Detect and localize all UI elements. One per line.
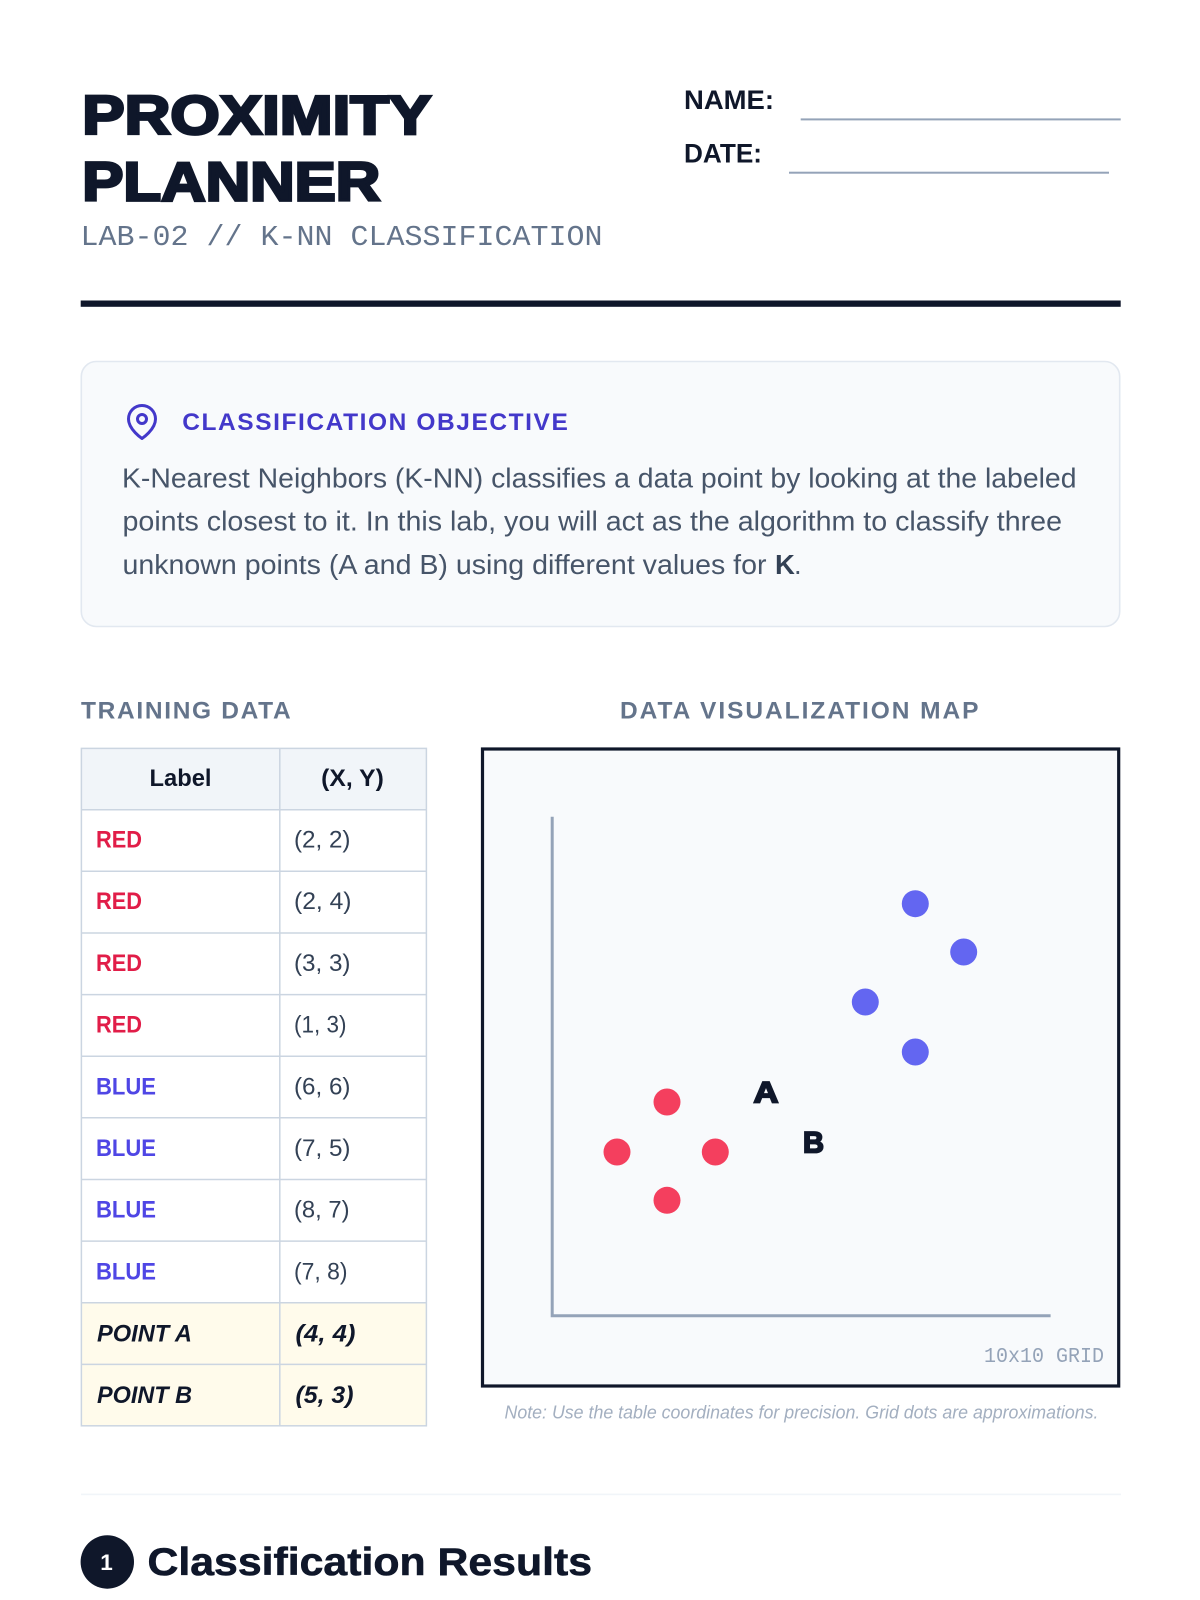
objective text: points closest to it. In this lab, you will act as the algorithm to classify three [122, 506, 1062, 536]
axes [552, 817, 1051, 1316]
date field: DATE: [684, 138, 762, 168]
icon: map pin [128, 406, 156, 438]
row: blue 7,5: (7, 5) [294, 1135, 350, 1162]
title [82, 85, 431, 212]
row: red 2,4: RED [96, 888, 142, 915]
subtitle: LAB-02 // K-NN CLASSIFICATION [80, 221, 602, 254]
row: red 2,2 [96, 826, 350, 854]
panel: classification objective [81, 362, 1120, 626]
step number badge: 1 [100, 1550, 113, 1575]
name field: NAME: [684, 85, 774, 115]
row: red 3,3: RED [96, 950, 142, 977]
chart: data visualization map [482, 749, 1119, 1386]
row: blue 7,8 [96, 1258, 348, 1285]
point A label: A [754, 1077, 778, 1110]
title: PLANNER [82, 151, 380, 212]
row: blue 7,5: BLUE [96, 1135, 156, 1162]
row: blue 8,7: (8, 7) [294, 1197, 350, 1224]
heading: training data: TRAINING DATA [81, 697, 291, 724]
objective text: K [775, 549, 795, 580]
point B label: B [803, 1127, 824, 1160]
objective text [122, 462, 1076, 580]
row: red 2,4 [96, 888, 352, 915]
row: point A [97, 1320, 356, 1348]
step number badge [81, 1535, 134, 1589]
row: blue 7,8: (7, 8) [294, 1258, 348, 1285]
title: PROXIMITY [82, 85, 431, 146]
table: training data [81, 748, 427, 1426]
row: red 3,3 [96, 950, 350, 977]
row: red 1,3: RED [96, 1012, 142, 1039]
red points [604, 1088, 729, 1214]
header rule [81, 300, 1121, 307]
row: blue 6,6: (6, 6) [294, 1073, 350, 1100]
row: blue 8,7: BLUE [96, 1197, 156, 1224]
row: blue 6,6 [96, 1073, 350, 1100]
objective heading: CLASSIFICATION OBJECTIVE [182, 409, 568, 436]
row: red 2,2: RED [96, 826, 142, 853]
objective text: K-Nearest Neighbors (K-NN) classifies a data point by looking at the labeled [122, 462, 1076, 493]
row: red 3,3: (3, 3) [294, 950, 350, 977]
objective text: unknown points (A and B) using different values for [122, 549, 766, 580]
row: point B: POINT B [97, 1382, 192, 1409]
row: point A: (4, 4) [296, 1321, 356, 1348]
heading: data visualization map: DATA VISUALIZATION MAP [620, 697, 978, 724]
section heading: classification results [81, 1535, 592, 1589]
blue points [852, 890, 977, 1066]
table header [150, 765, 384, 792]
row: point B: (5, 3) [296, 1382, 354, 1409]
section divider [81, 1494, 1121, 1495]
objective text: . [794, 549, 802, 580]
row: red 2,4: (2, 4) [294, 888, 352, 915]
row: blue 7,8: BLUE [96, 1258, 156, 1285]
section title: Classification Results [148, 1541, 592, 1584]
row: blue 7,5 [96, 1135, 350, 1162]
row: point B [97, 1382, 354, 1409]
row: blue 6,6: BLUE [96, 1073, 156, 1100]
row: point A: POINT A [97, 1321, 192, 1348]
row: blue 8,7 [96, 1197, 350, 1224]
table header: Label [150, 765, 212, 792]
row: red 1,3 [96, 1012, 346, 1039]
row: red 2,2: (2, 2) [294, 826, 350, 853]
table header: (X, Y) [321, 765, 384, 792]
header [80, 85, 1121, 307]
grid size label: 10x10 GRID [984, 1346, 1104, 1369]
row: red 1,3: (1, 3) [294, 1012, 346, 1039]
map note: Note: Use the table coordinates for precision. Grid dots are approximations. [504, 1403, 1098, 1423]
